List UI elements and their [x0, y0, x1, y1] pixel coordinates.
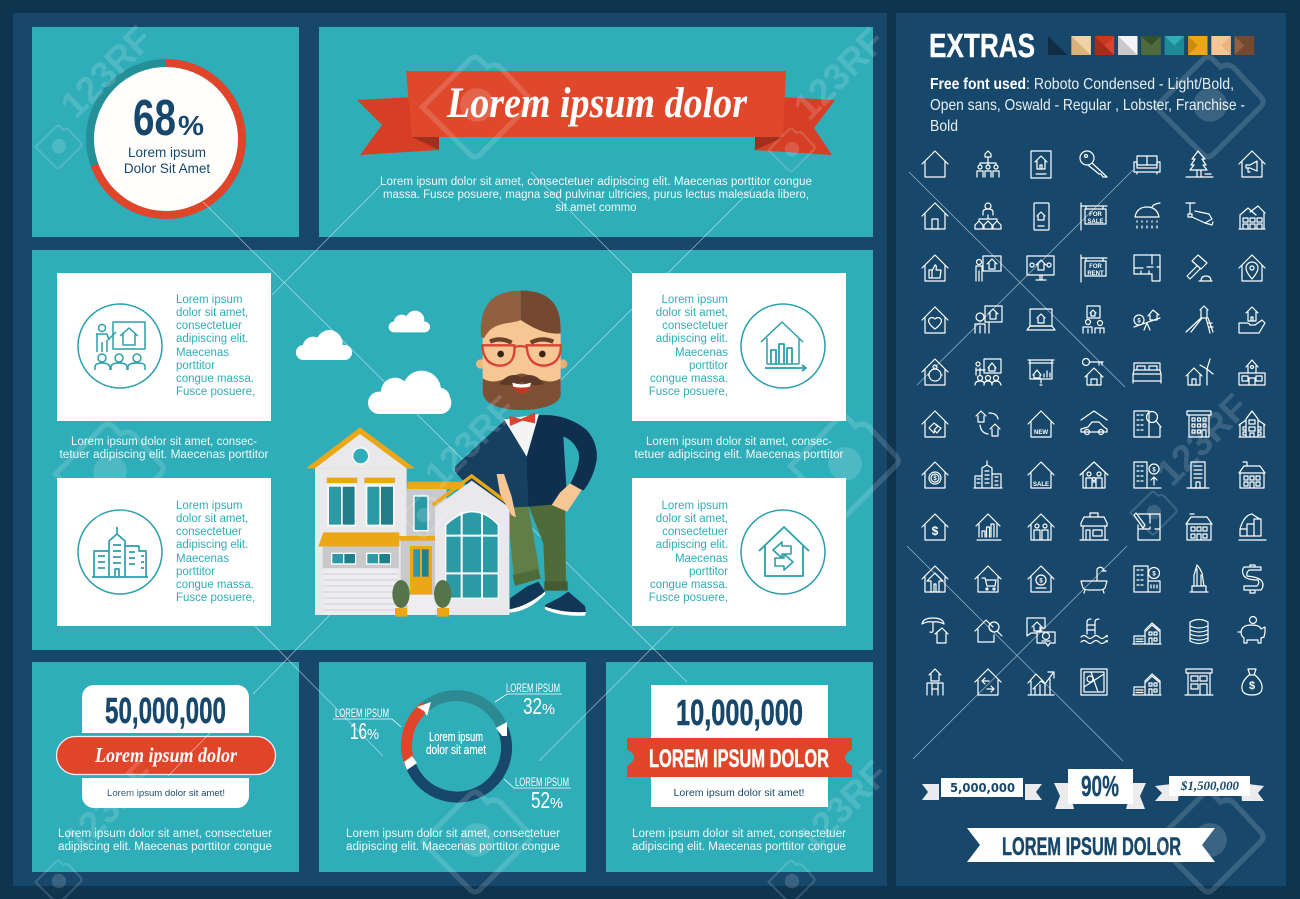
- main board: [13, 13, 887, 886]
- label 52 percent: 52: [531, 787, 550, 813]
- watermark diagonal lines: [168, 170, 1133, 776]
- label 32 percent: [495, 681, 562, 719]
- card text: consectetuer: [662, 320, 728, 332]
- label 52 percent: LOREM IPSUM: [515, 775, 569, 789]
- card text: adipiscing elit.: [656, 539, 728, 551]
- card text: congue massa.: [650, 579, 728, 591]
- icon: house handshake: [922, 411, 948, 437]
- right middle text: tetuer adipiscing elit. Maecenas porttitor: [634, 449, 844, 461]
- gauge value: %: [178, 110, 204, 141]
- ribbon: lorem ipsum dolor: LOREM IPSUM DOLOR: [1002, 833, 1181, 861]
- ribbon: $1,500,000: $1,500,000: [1180, 778, 1239, 793]
- card caption: Lorem ipsum dolor sit amet!: [674, 787, 804, 799]
- card: top left: [57, 273, 271, 421]
- icon: money bag: [1242, 669, 1262, 695]
- icon: cctv: [1186, 203, 1213, 225]
- icon: hand house: [1239, 307, 1265, 333]
- intro paragraph: sit amet commo: [555, 202, 637, 214]
- icon: house chart in circle: [741, 304, 825, 388]
- icon: car under roof: [1081, 411, 1107, 434]
- icon: for rent sign: [1081, 255, 1107, 282]
- icon: house up arrow: [922, 566, 948, 592]
- icon: blueprint pencil: [1134, 513, 1160, 540]
- card text: [176, 294, 255, 398]
- icon: garage house two: [1133, 674, 1161, 695]
- icon: arrows house: [975, 669, 1001, 695]
- icon: umbrella house: [922, 618, 948, 643]
- gauge ring track: [90, 63, 242, 215]
- icon: new house: [1028, 411, 1054, 437]
- card text: consectetuer: [176, 526, 242, 538]
- label 16 percent: LOREM IPSUM: [335, 706, 389, 720]
- icon: building coin: $: [1152, 572, 1156, 578]
- card text: Maecenas: [675, 347, 728, 359]
- icon: presenter tablet: [975, 306, 1002, 333]
- icon: laptop house: [1027, 309, 1055, 330]
- house: main block: [306, 427, 415, 615]
- card text: adipiscing elit.: [176, 333, 248, 345]
- card: bottom right: [632, 478, 846, 626]
- icon: garage house: [1133, 623, 1161, 644]
- icon: projector: [1028, 360, 1054, 385]
- label 52 percent: [504, 775, 571, 813]
- clouds: [296, 311, 451, 414]
- card text: Fusce posuere,: [176, 592, 255, 604]
- icon: map: [1081, 669, 1107, 695]
- left middle text: tetuer adipiscing elit. Maecenas porttitor: [60, 449, 269, 461]
- card text: Lorem ipsum: [662, 500, 728, 512]
- free font note: [930, 76, 1245, 135]
- ribbon left tail: [357, 97, 439, 155]
- donut centre text: [426, 729, 486, 757]
- right middle text: [634, 436, 844, 461]
- icon: house gear dollar: $: [933, 476, 937, 482]
- icon: house heart: [922, 307, 948, 333]
- card text: porttitor: [689, 566, 728, 578]
- pill text: Lorem ipsum dolor: [94, 743, 238, 767]
- label 32 percent: LOREM IPSUM: [506, 681, 560, 695]
- heading: Lorem ipsum dolor: [446, 80, 748, 127]
- icon: coin house: [1028, 566, 1054, 592]
- icon: for rent sign: FOR: [1089, 264, 1102, 270]
- gauge centre disc: [94, 67, 238, 211]
- icon: tall building: [1187, 462, 1209, 488]
- red ribbon: [627, 738, 852, 777]
- panel text: adipiscing elit. Maecenas porttitor congue: [346, 841, 560, 853]
- icon: bed: [1133, 363, 1161, 383]
- panel text: [58, 828, 272, 853]
- card text: adipiscing elit.: [656, 333, 728, 345]
- card text: porttitor: [176, 360, 215, 372]
- watermark overlay: 123RF: [786, 20, 893, 128]
- watermark overlay: 123RF: [1149, 386, 1256, 494]
- card text: consectetuer: [662, 526, 728, 538]
- panel text: Lorem ipsum dolor sit amet, consectetuer: [346, 828, 560, 840]
- plants: [392, 580, 451, 617]
- label 16 percent: 16: [350, 718, 367, 744]
- panel text: [346, 828, 560, 853]
- card text: adipiscing elit.: [176, 539, 248, 551]
- icon: for sale sign: FOR: [1089, 212, 1102, 218]
- icon: pool: [1081, 619, 1107, 644]
- icon: office block: [1185, 669, 1213, 695]
- card text: dolor sit amet,: [656, 307, 728, 319]
- icon: people under house sign: [1083, 306, 1104, 333]
- icon: shower: [1135, 203, 1160, 228]
- icon: floor plan: [1134, 255, 1160, 281]
- donut segment 52 percent: [411, 729, 507, 797]
- colour swatches: [1048, 36, 1254, 55]
- icon: mansion two: [1239, 411, 1265, 437]
- man: head: [476, 291, 567, 410]
- free font note: Open sans, Oswald - Regular , Lobster, Franchise -: [930, 97, 1245, 114]
- card text: Lorem ipsum: [662, 294, 728, 306]
- red pill: [56, 736, 276, 774]
- card text: Lorem ipsum: [176, 294, 242, 306]
- icon: bathtub: [1081, 567, 1107, 593]
- icon: speech bubbles: [1027, 618, 1055, 646]
- label 16 percent: %: [367, 726, 379, 743]
- ribbon: lorem ipsum dolor: [967, 828, 1215, 862]
- icon: key: [1080, 151, 1107, 177]
- intro paragraph: [380, 176, 812, 214]
- left middle text: [60, 436, 269, 461]
- icon: round tower: [1190, 620, 1208, 644]
- card text: dolor sit amet,: [176, 307, 248, 319]
- icon: family house: [1080, 462, 1108, 488]
- card text: Maecenas: [176, 553, 229, 565]
- card caption: Lorem ipsum dolor sit amet!: [107, 788, 225, 799]
- icon grid: [922, 151, 1266, 695]
- panel text: Lorem ipsum dolor sit amet, consectetuer: [58, 828, 272, 840]
- icon: small townhouse: [1186, 514, 1212, 540]
- stat card: [82, 685, 249, 808]
- icon: couple house: [1028, 514, 1054, 540]
- card text: congue massa.: [176, 373, 254, 385]
- panel: donut chart: [319, 662, 586, 872]
- watermark overlay: 123RF: [56, 753, 163, 861]
- gauge caption: Dolor Sit Amet: [124, 161, 210, 176]
- icon: chart house: [976, 514, 1001, 540]
- man: jacket: [455, 413, 597, 507]
- card text: porttitor: [176, 566, 215, 578]
- icon: dollar: [1242, 565, 1263, 593]
- icon: magnify house: [975, 620, 1002, 642]
- card text: dolor sit amet,: [176, 513, 248, 525]
- house: right gable: [433, 476, 512, 615]
- icon: growth chart house: [1028, 672, 1054, 695]
- ribbon right tail: [754, 97, 835, 155]
- icon: sale house: SALE: [1033, 482, 1049, 488]
- panel: 10,000,000 stat: [606, 662, 873, 872]
- donut centre text: Lorem ipsum: [429, 729, 483, 744]
- ribbon: 90%: [1054, 769, 1146, 809]
- intro paragraph: massa. Fusce posuere, magna sed pulvinar ultricies, purus lectus malesuada libero,: [383, 189, 809, 201]
- right middle text: Lorem ipsum dolor sit amet, consec-: [646, 436, 832, 448]
- icon: playground: [1186, 306, 1213, 333]
- icon: audience: [975, 359, 1001, 385]
- ribbon: 5,000,000: 5,000,000: [950, 780, 1015, 795]
- icon: org houses: [975, 203, 1001, 229]
- panel text: adipiscing elit. Maecenas porttitor congue: [58, 841, 272, 853]
- ribbon main: [406, 71, 786, 137]
- icon: for sale sign: [1081, 203, 1107, 230]
- donut centre text: dolor sit amet: [426, 742, 486, 757]
- card: bottom left: [57, 478, 271, 626]
- ribbon: $1,500,000: [1155, 776, 1264, 801]
- icon: balance coin and house: [1134, 310, 1160, 330]
- gauge caption: Lorem ipsum: [128, 145, 206, 160]
- ribbon fold left: [412, 137, 439, 150]
- card text: consectetuer: [176, 320, 242, 332]
- icon: house: [922, 151, 948, 177]
- panel: title banner: [319, 27, 873, 237]
- ribbon fold right: [755, 137, 784, 150]
- free font note: : Roboto Condensed - Light/Bold,: [1026, 76, 1234, 93]
- icon: person house head: [927, 669, 943, 695]
- icon: shop: [1080, 513, 1108, 540]
- icon: piggy bank: [1238, 616, 1265, 643]
- icon: coin house: $: [1039, 578, 1043, 584]
- watermark overlay: 123RF: [53, 18, 160, 126]
- card gap behind pill: [82, 733, 249, 778]
- label 52 percent: %: [550, 795, 563, 812]
- watermark overlay: 123RF: [417, 388, 524, 496]
- icon: presenter in circle: [78, 304, 162, 388]
- free font note: Bold: [930, 118, 958, 135]
- icon: tablet house: [1031, 151, 1051, 178]
- icon: school: [1239, 360, 1265, 385]
- label 32 percent: 32: [523, 693, 542, 719]
- icon: tree: [1186, 151, 1213, 177]
- card text: Fusce posuere,: [649, 592, 728, 604]
- label 32 percent: %: [542, 701, 555, 718]
- icon: house dollar: [922, 514, 948, 540]
- card text: Maecenas: [675, 553, 728, 565]
- donut segment 16 percent: [406, 706, 426, 766]
- icon: key house: [1082, 358, 1103, 385]
- icon: mansion: [1239, 206, 1265, 229]
- icon: house thumb: [922, 255, 948, 281]
- stat card: [651, 685, 828, 807]
- man: hands: [497, 474, 582, 517]
- icon: chart buildings: [1239, 514, 1266, 540]
- icon: windmill house: [1186, 359, 1213, 385]
- stat number: 10,000,000: [676, 692, 803, 733]
- extras heading: EXTRAS: [929, 27, 1035, 64]
- icon: new house: NEW: [1034, 430, 1048, 436]
- icon: building: [1187, 411, 1211, 437]
- card text: [649, 294, 728, 398]
- card: top right: [632, 273, 846, 421]
- icon: for rent sign: RENT: [1087, 271, 1104, 277]
- icon: cart house: [975, 566, 1001, 592]
- panel: central section: [32, 250, 873, 650]
- free font note: Free font used: [930, 76, 1026, 93]
- icon: house arrows in circle: [741, 510, 825, 594]
- gauge value: 68: [133, 89, 176, 146]
- stat number: 50,000,000: [105, 690, 226, 731]
- icon: arrows houses: [976, 411, 1000, 436]
- card text: congue massa.: [176, 579, 254, 591]
- donut segment 32 percent: [426, 696, 503, 729]
- card text: Lorem ipsum: [176, 500, 242, 512]
- card text: [649, 500, 728, 604]
- card text: Fusce posuere,: [176, 386, 255, 398]
- icon: gavel: [1187, 255, 1212, 281]
- icon: monitor house: [1027, 256, 1054, 280]
- icon: org people: [977, 151, 999, 177]
- icon: balance coin and house: $: [1137, 318, 1141, 324]
- ribbon: 5,000,000: [922, 778, 1042, 800]
- icon: city: [974, 461, 1002, 488]
- intro paragraph: Lorem ipsum dolor sit amet, consectetuer adipiscing elit. Maecenas porttitor congue: [380, 176, 812, 188]
- panel text: Lorem ipsum dolor sit amet, consectetuer: [632, 828, 846, 840]
- left middle text: Lorem ipsum dolor sit amet, consec-: [71, 436, 257, 448]
- card text: congue massa.: [650, 373, 728, 385]
- icon: house piggy: [922, 359, 948, 385]
- man: legs and shoes: [509, 503, 586, 616]
- icon: presenter: [976, 256, 1001, 281]
- gauge ring value: [94, 63, 242, 215]
- illustration: clouds, house and man: [296, 291, 597, 617]
- icon: building coin arrow: [1134, 462, 1161, 488]
- icon: money bag: $: [1249, 680, 1255, 692]
- icon: sale house: [1028, 462, 1054, 488]
- panel: 68 percent gauge: [32, 27, 299, 237]
- card text: Maecenas: [176, 347, 229, 359]
- ribbon: 90%: 90%: [1081, 771, 1119, 803]
- ribbon text: LOREM IPSUM DOLOR: [649, 745, 829, 773]
- label 16 percent: [333, 706, 401, 744]
- card text: [176, 500, 255, 604]
- card text: porttitor: [689, 360, 728, 372]
- extras board: [896, 13, 1286, 886]
- gauge caption: [124, 145, 210, 176]
- donut arrows: [404, 702, 507, 770]
- icon: magnify building: [1134, 411, 1161, 437]
- panel text: adipiscing elit. Maecenas porttitor congue: [632, 841, 846, 853]
- house: middle and porch: [399, 482, 464, 615]
- icon: townhouse: [1239, 462, 1265, 488]
- icon: house dollar: $: [932, 524, 939, 538]
- icon: phone house: [1034, 203, 1049, 230]
- card text: dolor sit amet,: [656, 513, 728, 525]
- icon: house pin: [1239, 255, 1265, 281]
- icon: house gear dollar: [922, 462, 948, 488]
- panel: 50,000,000 stat: [32, 662, 299, 872]
- card text: Fusce posuere,: [649, 386, 728, 398]
- icon: building coin: [1134, 566, 1160, 592]
- icon: city in circle: [78, 510, 162, 594]
- icon: building coin arrow: $: [1152, 468, 1156, 474]
- icon: sofa: [1134, 156, 1160, 174]
- panel text: [632, 828, 846, 853]
- icon: for sale sign: SALE: [1087, 219, 1104, 225]
- icon: house megaphone: [1239, 151, 1265, 177]
- icon: skyscraper: [1190, 565, 1208, 592]
- watermark overlay: 123RF: [789, 753, 896, 861]
- icon: house door: [922, 203, 948, 229]
